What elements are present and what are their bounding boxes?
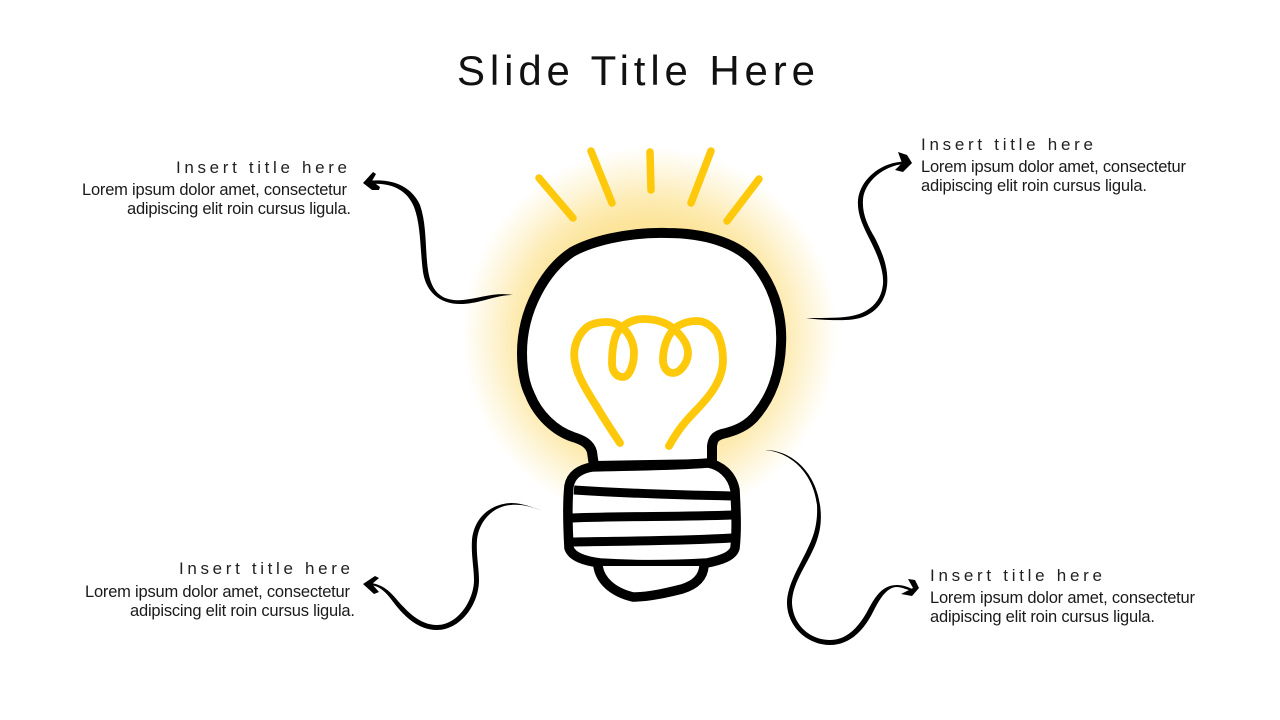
text: top left body — [82, 181, 351, 218]
screw threads — [572, 490, 732, 542]
arrow: top left — [363, 172, 513, 304]
text: bottom right body: Lorem ipsum dolor amet, consectetur — [930, 589, 1196, 607]
text: top right body: adipiscing elit roin cursus ligula. — [921, 177, 1147, 195]
filament — [574, 319, 723, 446]
text: bottom left body — [85, 583, 355, 620]
text: top right body — [921, 158, 1186, 195]
text: top right title: Insert title here — [921, 135, 1093, 154]
arrow: bottom left — [363, 503, 542, 630]
arrow: bottom right — [765, 450, 919, 645]
text: bottom right body — [930, 589, 1196, 626]
callout: top left — [82, 158, 513, 304]
text: top left title: Insert title here — [176, 158, 347, 177]
title: Slide Title Here — [457, 47, 815, 94]
text: bottom right title: Insert title here — [930, 566, 1102, 585]
text: top right body: Lorem ipsum dolor amet, consectetur — [921, 158, 1186, 176]
arrow: top right — [806, 152, 912, 320]
text: bottom left title: Insert title here — [179, 559, 350, 578]
text: bottom left body: adipiscing elit roin cursus ligula. — [130, 602, 355, 620]
callout: bottom left — [85, 503, 542, 630]
text: top left body: adipiscing elit roin cursus ligula. — [127, 200, 351, 218]
light rays — [539, 151, 759, 221]
glow behind bulb — [462, 147, 838, 523]
bulb cap — [598, 566, 704, 597]
text: top left body: Lorem ipsum dolor amet, consectetur — [82, 181, 348, 199]
text: bottom right body: adipiscing elit roin cursus ligula. — [930, 608, 1155, 626]
callout: top right — [806, 135, 1186, 320]
screw base — [568, 463, 736, 564]
callout: bottom right — [765, 450, 1196, 645]
icon: light bulb — [522, 151, 781, 597]
bulb glass — [522, 233, 781, 466]
text: bottom left body: Lorem ipsum dolor amet, consectetur — [85, 583, 350, 601]
